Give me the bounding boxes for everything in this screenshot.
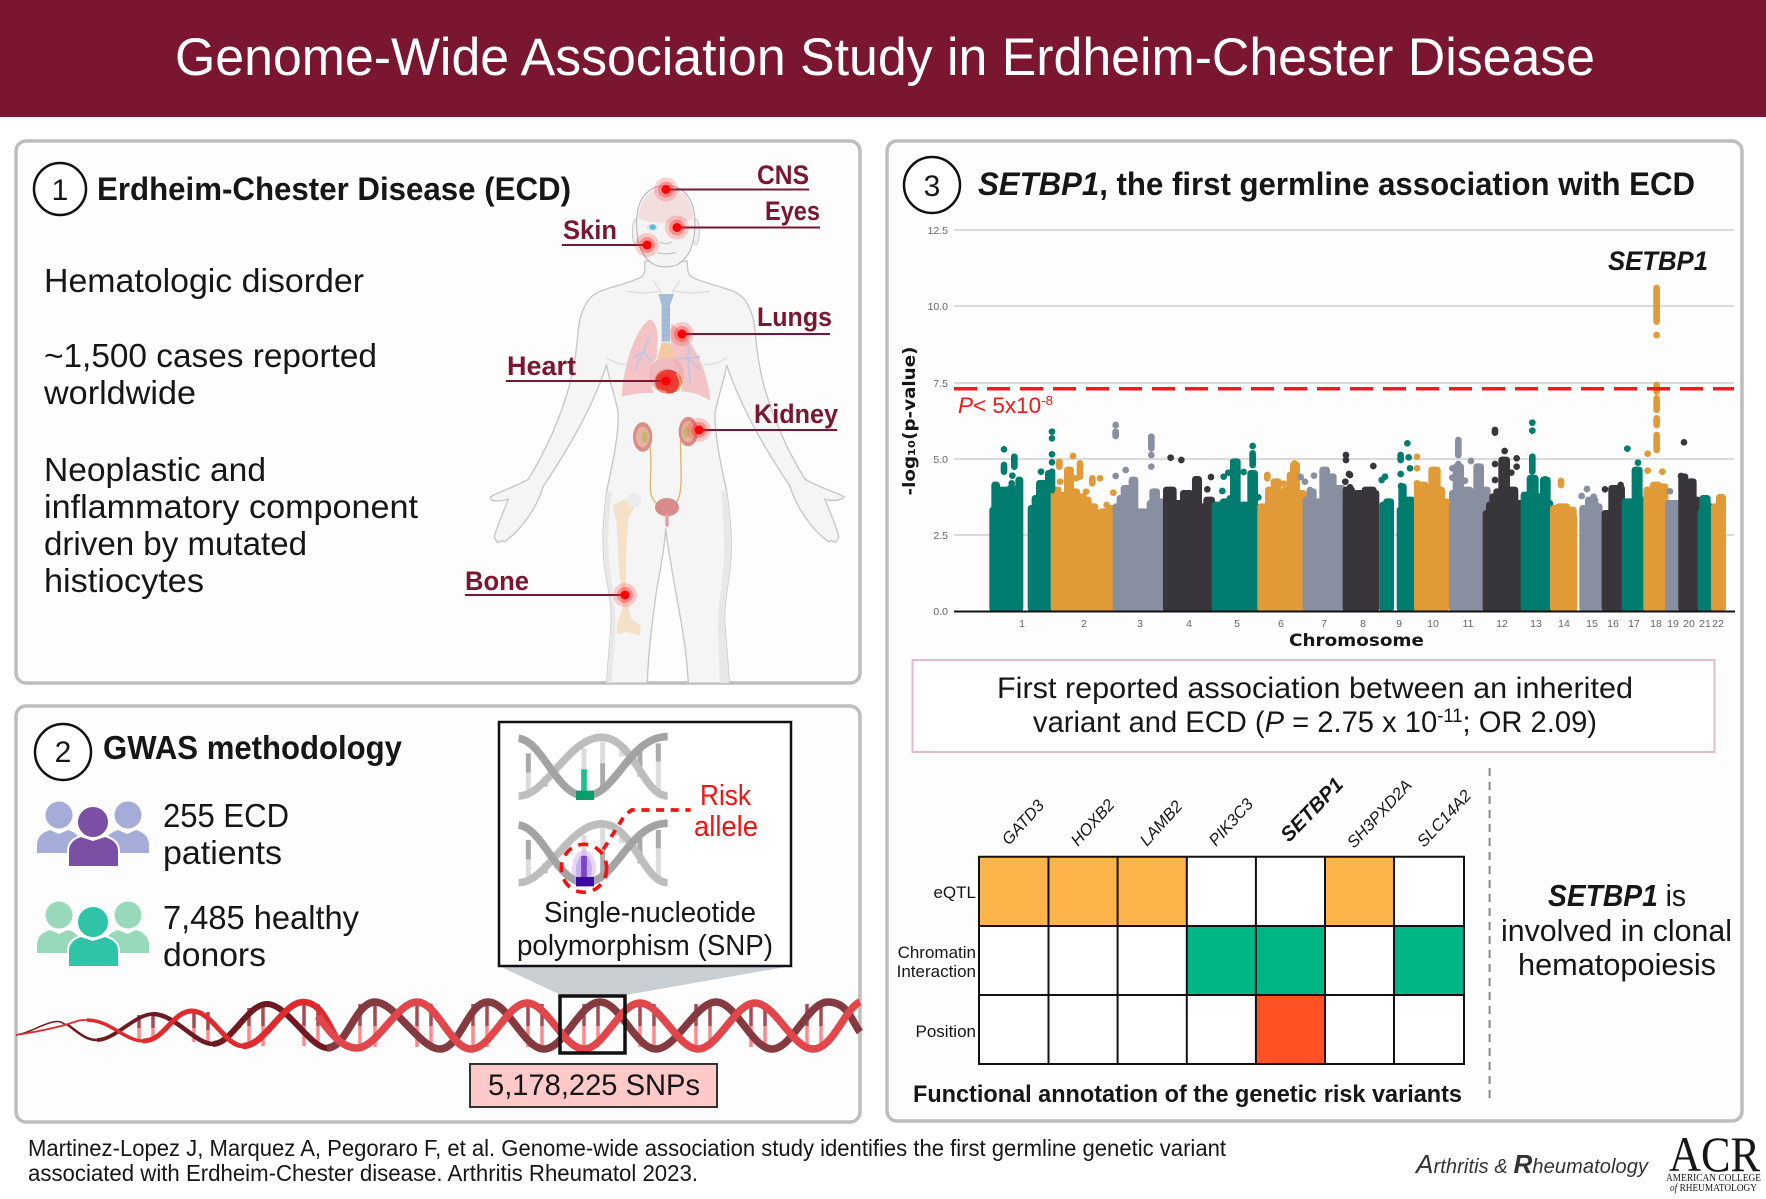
chromosome columns right half — [1346, 460, 1723, 608]
panel 1 heading: Erdheim-Chester Disease (ECD) — [97, 171, 571, 207]
text: 255 ECD patients: 255 ECD — [163, 797, 289, 834]
highlighted SNP window — [560, 996, 625, 1053]
title: Genome-Wide Association Study in Erdheim-Chester Disease — [175, 28, 1595, 87]
association callout box: First reported association between an inherited — [997, 672, 1633, 705]
header banner — [0, 0, 1766, 117]
y tick labels: 2.5 — [933, 530, 948, 542]
chromosome labels: 16 — [1607, 618, 1619, 630]
left half points — [995, 425, 1350, 510]
label: risk allele: Risk — [700, 780, 751, 812]
gene labels: GATD3 — [999, 796, 1049, 849]
citation: associated with Erdheim-Chester disease. Arthritis Rheumatol 2023. — [28, 1160, 698, 1186]
text: 255 ECD patients: patients — [163, 834, 282, 871]
label: risk allele — [694, 780, 758, 843]
chromosome labels: 19 — [1667, 618, 1679, 630]
light strand — [16, 1020, 87, 1035]
chromosome labels: 5 — [1234, 618, 1240, 630]
y tick labels: 5.0 — [933, 454, 948, 466]
association callout box: -11 — [1437, 706, 1463, 727]
disease facts text: inflammatory component — [44, 488, 418, 525]
chromosome labels: 22 — [1712, 618, 1724, 630]
callout: CNS: CNS — [757, 160, 809, 190]
citation — [28, 1135, 1227, 1186]
number badge 3 — [904, 157, 960, 213]
significance threshold line — [954, 387, 1734, 390]
label: SNP — [517, 897, 773, 962]
chromosome labels: 7 — [1321, 618, 1327, 630]
label: SNP: polymorphism (SNP) — [517, 930, 773, 962]
SETBP1 conclusion text: involved in clonal — [1501, 913, 1732, 948]
disease facts text: histiocytes — [44, 562, 204, 599]
number badge 2: 2 — [55, 736, 71, 769]
y tick labels: 10.0 — [928, 301, 948, 313]
chromosome labels: 18 — [1650, 618, 1662, 630]
text: 7,485 healthy donors — [163, 899, 359, 973]
SETBP1 conclusion text: SETBP1 is — [1548, 878, 1686, 913]
icon: normal DNA — [519, 737, 668, 796]
x axis — [954, 610, 1735, 612]
label: SNP count — [470, 1064, 717, 1107]
chromosome labels — [1019, 618, 1724, 630]
chromosome labels: 17 — [1628, 618, 1640, 630]
number badge 3: 3 — [924, 170, 940, 203]
heatmap cells — [979, 857, 1464, 1064]
row labels: eQTL — [933, 883, 976, 902]
association callout box: ; OR 2.09) — [1463, 706, 1597, 739]
rungs — [139, 1004, 821, 1030]
association callout box — [912, 660, 1714, 752]
peak label: SETBP1 — [1608, 246, 1708, 276]
panel 2: GWAS methodology — [16, 706, 860, 1122]
gene labels: LAMB2 — [1137, 797, 1186, 850]
disease facts text: ~1,500 cases reported — [44, 337, 377, 374]
chromosome labels: 21 — [1699, 618, 1711, 630]
chromosome labels: 3 — [1137, 618, 1143, 630]
SNP inset box — [499, 722, 791, 966]
row labels: Position — [916, 1022, 976, 1041]
row labels: Interaction — [897, 962, 976, 981]
human body illustration — [491, 186, 844, 683]
callout: Bone: Bone — [465, 566, 529, 596]
Manhattan plot — [900, 225, 1735, 651]
x axis title: Chromosome — [1289, 631, 1424, 651]
gene labels: HOXB2 — [1068, 796, 1118, 850]
y axis title: -log₁₀(p-value) — [900, 346, 920, 496]
gene labels: SETBP1 — [1276, 773, 1348, 846]
y tick labels — [928, 225, 948, 618]
panel 3 heading: SETBP1, the first germline association with ECD — [978, 166, 1695, 202]
gene labels: PIK3C3 — [1206, 795, 1258, 850]
text: 7,485 healthy donors: donors — [163, 936, 266, 973]
callout: Lungs — [670, 302, 832, 346]
right half points — [1350, 288, 1722, 517]
callout: Eyes: Eyes — [765, 196, 820, 226]
number badge 1: 1 — [52, 174, 68, 207]
text: 7,485 healthy donors: 7,485 healthy — [163, 899, 359, 936]
y tick labels: 7.5 — [933, 378, 948, 390]
threshold label: -8 — [1041, 393, 1053, 408]
callout: Skin — [562, 215, 659, 257]
journal logo: Arthritis & Rheumatology — [1414, 1149, 1649, 1179]
SETBP1 conclusion text: hematopoiesis — [1518, 947, 1716, 982]
callout: CNS — [654, 160, 809, 202]
text: 255 ECD patients — [163, 797, 289, 871]
zoom wedge — [499, 966, 791, 995]
callout: Bone — [465, 566, 637, 607]
dark strand — [16, 1022, 68, 1035]
chromosome labels: 6 — [1278, 618, 1284, 630]
chromosome labels: 20 — [1683, 618, 1695, 630]
number badge 2 — [35, 724, 91, 780]
association callout box: variant and ECD (P = 2.75 x 10 — [1033, 706, 1442, 739]
chromosome labels: 1 — [1019, 618, 1025, 630]
number badge 1 — [34, 163, 86, 215]
chromosome labels: 15 — [1586, 618, 1598, 630]
grid — [954, 230, 1734, 535]
citation: Martinez-Lopez J, Marquez A, Pegoraro F, et al. Genome-wide association study identifies the first germline genetic variant — [28, 1135, 1227, 1161]
y tick labels: 12.5 — [928, 225, 948, 237]
threshold label: P< 5x10 — [958, 393, 1040, 418]
icon: patients group — [37, 802, 149, 867]
icon: healthy donors group — [37, 902, 149, 967]
gene labels: SH3PXD2A — [1344, 776, 1416, 852]
callout: Heart: Heart — [507, 351, 576, 381]
disease facts text: driven by mutated — [44, 525, 307, 562]
y tick labels: 0.0 — [933, 606, 948, 618]
callout: Eyes — [665, 196, 820, 240]
panel 3: SETBP1 association — [887, 141, 1742, 1121]
row labels — [897, 883, 976, 1041]
row labels: Chromatin — [898, 943, 976, 962]
chromosome columns left half — [993, 462, 1343, 608]
functional annotation heatmap — [897, 773, 1475, 1108]
chromosome labels: 10 — [1427, 618, 1439, 630]
panel 2 heading: GWAS methodology — [103, 729, 403, 766]
callout: Kidney — [687, 399, 838, 442]
callout: Kidney: Kidney — [754, 399, 838, 429]
icon: risk-allele DNA — [519, 810, 691, 892]
chromosome labels: 9 — [1396, 618, 1402, 630]
SETBP1 conclusion text — [1501, 878, 1732, 982]
panel 1: Erdheim-Chester Disease — [16, 141, 860, 683]
chromosome labels: 8 — [1360, 618, 1366, 630]
chromosome labels: 13 — [1530, 618, 1542, 630]
gene labels — [999, 773, 1475, 852]
disease facts text: worldwide — [43, 374, 196, 411]
chromosome labels: 2 — [1081, 618, 1087, 630]
heatmap caption: Functional annotation of the genetic risk variants — [913, 1081, 1462, 1108]
chromosome labels: 4 — [1186, 618, 1192, 630]
genome DNA strand — [16, 996, 860, 1053]
disease facts text: Neoplastic and — [44, 451, 266, 488]
vertical divider — [1489, 768, 1491, 1100]
callout: Lungs: Lungs — [757, 302, 832, 332]
chest organs — [622, 294, 710, 401]
callout: Skin: Skin — [563, 215, 617, 245]
callout: Heart — [506, 351, 678, 393]
disease facts text — [43, 262, 418, 599]
chromosome labels: 14 — [1558, 618, 1570, 630]
label: risk allele: allele — [694, 811, 758, 843]
disease facts text: Hematologic disorder — [44, 262, 364, 299]
organ callouts — [465, 160, 838, 607]
chromosome labels: 12 — [1496, 618, 1508, 630]
label: SNP count: 5,178,225 SNPs — [488, 1069, 700, 1102]
gene labels: SLC14A2 — [1414, 787, 1475, 851]
chromosome labels: 11 — [1463, 618, 1474, 630]
label: SNP: Single-nucleotide — [544, 897, 756, 929]
